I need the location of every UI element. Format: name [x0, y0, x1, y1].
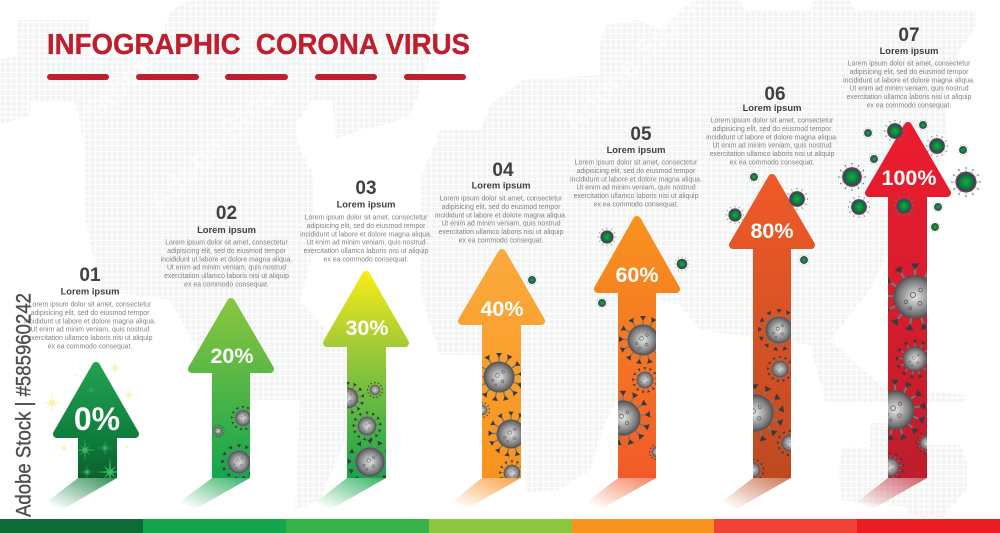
viruses on arrow 05	[618, 316, 656, 460]
text block 02: Ut enim ad minim veniam, quis nostrud	[167, 265, 286, 272]
text block 06: Ut enim ad minim veniam, quis nostrud	[712, 143, 832, 150]
title: INFOGRAPHIC CORONA VIRUS	[47, 29, 470, 61]
text block 04: 04	[492, 160, 514, 181]
text block 04: Lorem ipsum dolor sit amet, consectetur	[440, 196, 563, 202]
text block 04: ex ea commodo consequat.	[459, 237, 543, 244]
text block 02: 02	[216, 203, 237, 224]
text block 01: Lorem ipsum dolor sit amet, consectetur	[29, 302, 152, 308]
text block 05	[570, 124, 702, 208]
text block 03: Lorem ipsum dolor sit amet, consectetur	[305, 214, 428, 222]
arrow 05: 60%	[575, 220, 676, 511]
vertical stock id: Adobe Stock | #585960242	[12, 293, 36, 517]
text block 01: Lorem ipsum	[61, 286, 119, 296]
text block 05: exercitation ullamco laboris nisi ut aliquip	[574, 193, 699, 200]
text block 03: 03	[355, 178, 377, 199]
text block 03	[300, 178, 432, 263]
text block 05: Lorem ipsum	[607, 144, 665, 155]
stock watermarks: Adobe Stock	[142, 67, 295, 220]
text block 04	[435, 160, 567, 244]
text block 04: exercitation ullamco laboris nisi ut aliquip	[439, 229, 564, 236]
text block 07: Lorem ipsum	[880, 45, 938, 56]
text block 03: incididunt ut labore et dolore magna aliqua.	[300, 231, 432, 238]
stock watermarks: Adobe Stock	[97, 377, 250, 530]
text block 02	[161, 203, 292, 288]
text block 07: Lorem ipsum dolor sit amet, consectetur	[848, 60, 971, 68]
arrow 05: 60%: 60%	[615, 263, 659, 287]
bottom colour bar	[0, 519, 1000, 533]
text block 07: incididunt ut labore et dolore magna aliqua.	[843, 77, 975, 84]
title dashes	[47, 74, 466, 80]
text block 06: incididunt ut labore et dolore magna aliqua.	[706, 134, 838, 141]
text block 01: Ut enim ad minim veniam, quis nostrud	[30, 327, 150, 334]
text block 04: Lorem ipsum	[472, 180, 530, 190]
text block 05: 05	[630, 124, 652, 145]
text block 07: adipisicing elit, sed do eiusmod tempor	[850, 69, 969, 76]
text block 03: Lorem ipsum	[337, 198, 395, 210]
text block 06	[706, 84, 838, 166]
green viruses around arrows	[526, 119, 981, 309]
arrow 01: 0%	[35, 359, 137, 511]
text block 03: adipisicing elit, sed do eiusmod tempor	[307, 223, 426, 230]
text block 07	[843, 25, 975, 109]
text block 07: exercitation ullamco laboris nisi ut aliquip	[847, 94, 972, 101]
text block 04: adipisicing elit, sed do eiusmod tempor	[442, 204, 561, 211]
text block 03: ex ea commodo consequat.	[324, 256, 408, 263]
text block 02: ex ea commodo consequat.	[184, 281, 269, 288]
viruses on arrow 04	[482, 353, 521, 478]
text block 02: Lorem ipsum	[197, 224, 256, 235]
text block 07: 07	[898, 25, 920, 46]
arrow 07: 100%	[858, 122, 951, 508]
text block 05: Ut enim ad minim veniam, quis nostrud	[576, 185, 696, 192]
viruses on arrow 06	[753, 309, 791, 478]
text block 06: ex ea commodo consequat.	[730, 159, 814, 166]
text block 05: adipisicing elit, sed do eiusmod tempor	[577, 168, 696, 175]
arrow 04: 40%: 40%	[480, 297, 524, 321]
arrow 02: 20%: 20%	[210, 344, 254, 368]
text block 01: ex ea commodo consequat.	[48, 343, 132, 350]
text block 06: Lorem ipsum	[743, 102, 801, 113]
text block 02: adipisicing elit, sed do eiusmod tempor	[167, 248, 287, 255]
arrow 02: 20%	[168, 302, 270, 511]
text block 01: incididunt ut labore et dolore magna aliqua.	[24, 318, 156, 325]
text block 02: exercitation ullamco laboris nisi ut aliquip	[164, 273, 289, 280]
text block 01	[24, 265, 156, 350]
arrow 03: 30%: 30%	[345, 316, 389, 340]
text block 06: adipisicing elit, sed do eiusmod tempor	[713, 126, 832, 133]
text block 01: 01	[79, 265, 101, 286]
text block 05: ex ea commodo consequat.	[594, 201, 678, 208]
text block 01: adipisicing elit, sed do eiusmod tempor	[31, 310, 150, 317]
arrow 01: 0%: 0%	[74, 401, 120, 437]
text block 05: incididunt ut labore et dolore magna aliqua.	[570, 176, 702, 183]
text block 07: Ut enim ad minim veniam, quis nostrud	[849, 86, 969, 93]
arrow 03: 30%	[304, 275, 405, 511]
viruses on arrow 03	[347, 382, 386, 478]
text block 03: Ut enim ad minim veniam, quis nostrud	[306, 240, 426, 247]
text block 06: 06	[764, 84, 786, 105]
arrow 04: 40%	[440, 253, 541, 511]
text block 07: ex ea commodo consequat.	[867, 102, 951, 109]
text block 04: incididunt ut labore et dolore magna aliqua.	[435, 212, 567, 219]
text block 05: Lorem ipsum dolor sit amet, consectetur	[575, 160, 698, 166]
arrow 06: 80%	[710, 178, 811, 511]
text block 06: exercitation ullamco laboris nisi ut aliquip	[710, 151, 835, 158]
text block 06: Lorem ipsum dolor sit amet, consectetur	[711, 118, 834, 124]
text block 04: Ut enim ad minim veniam, quis nostrud	[441, 221, 561, 228]
viruses on arrow 07	[888, 263, 927, 478]
arrow 07: 100%: 100%	[882, 166, 936, 190]
text block 02: incididunt ut labore et dolore magna aliqua.	[161, 256, 292, 263]
stock watermarks: Adobe Stock	[7, 47, 160, 200]
text block 03: exercitation ullamco laboris nisi ut aliquip	[304, 248, 429, 255]
text block 02: Lorem ipsum dolor sit amet, consectetur	[165, 240, 288, 246]
viruses on arrow 02	[212, 406, 250, 478]
arrow 06: 80%: 80%	[750, 219, 794, 243]
text block 01: exercitation ullamco laboris nisi ut aliquip	[28, 335, 153, 342]
stock watermarks: Adobe Stock	[357, 57, 510, 210]
